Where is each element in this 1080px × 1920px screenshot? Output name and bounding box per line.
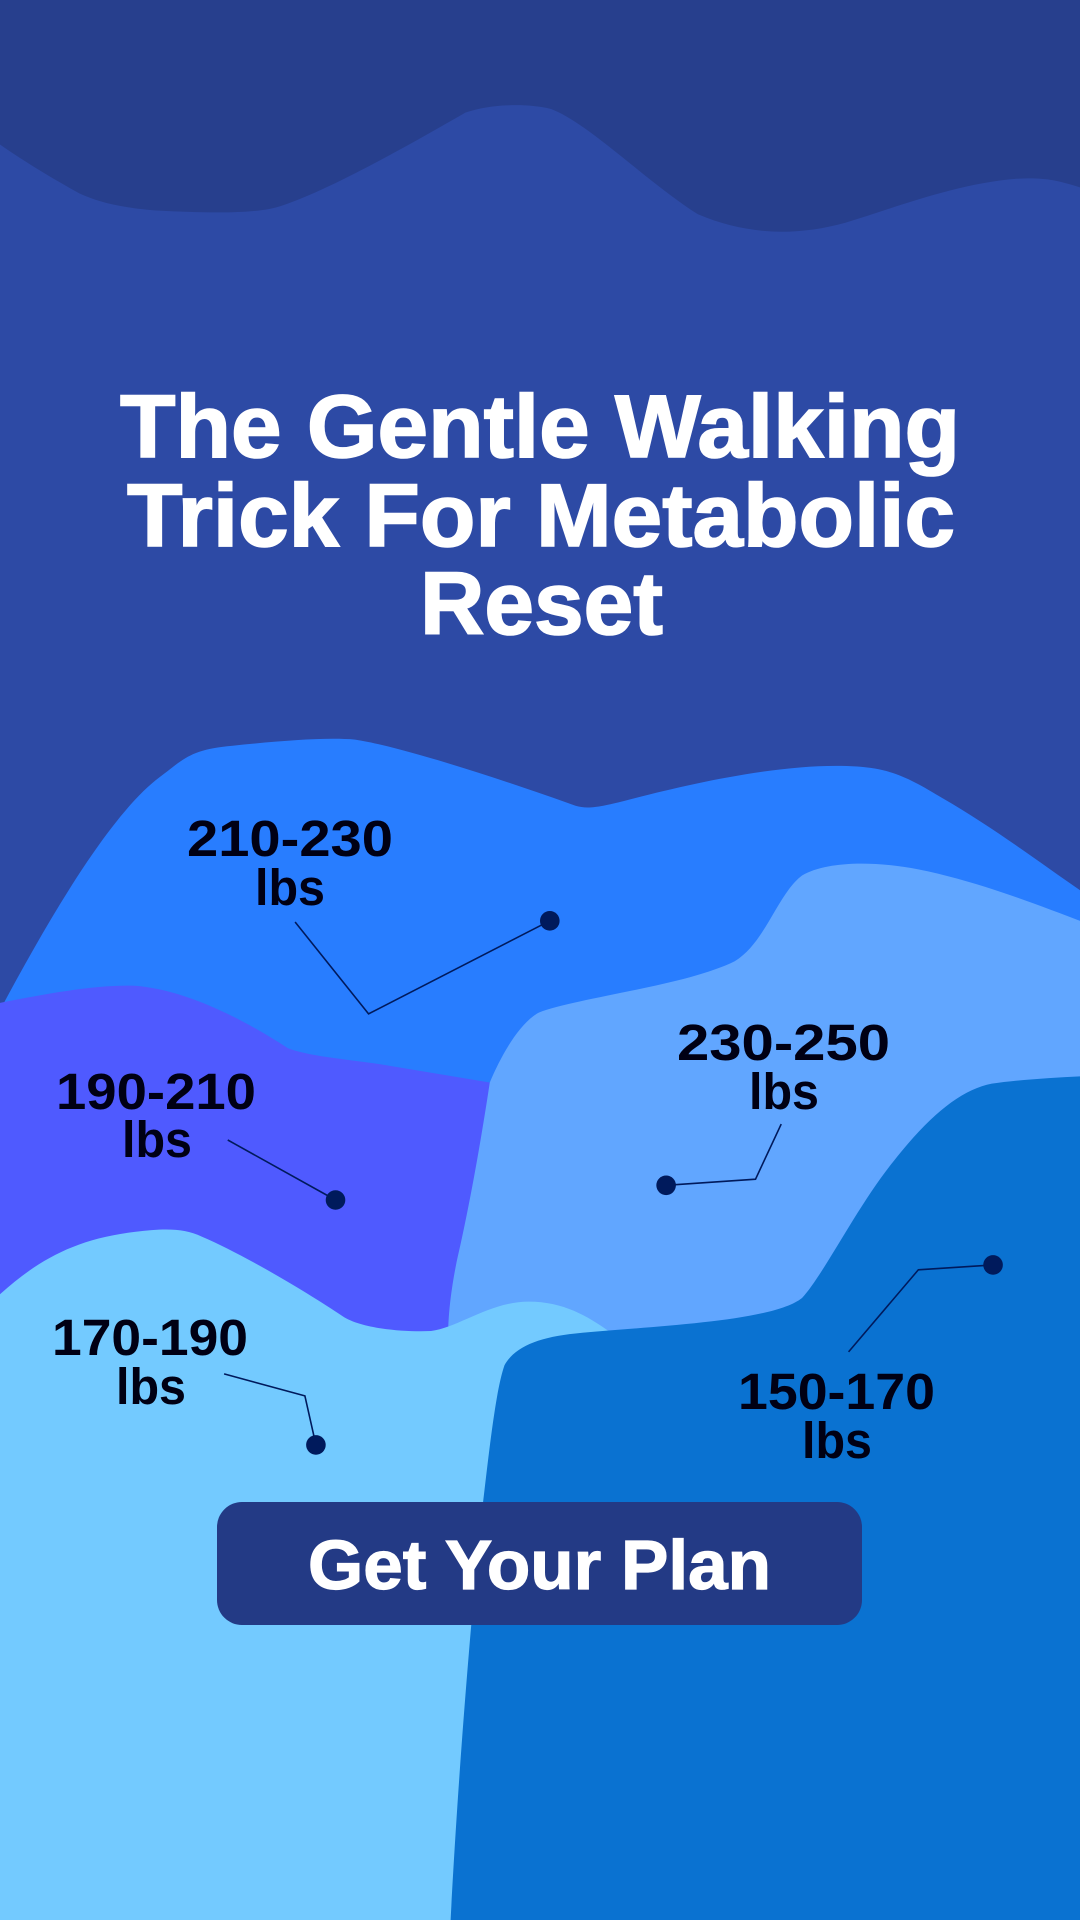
callout: 170-190 lbs [224,1374,326,1455]
label: 150-170 lbs: lbs [802,1412,872,1469]
label: 210-230 lbs: 210-230 [187,810,393,867]
label: 170-190 lbs: lbs [116,1358,186,1415]
callout: 210-230 lbs [295,911,560,1014]
label: 190-210 lbs [56,1063,256,1168]
callout: 190-210 lbs [228,1140,345,1210]
label: 210-230 lbs: lbs [255,859,325,916]
region: 230-250 lbs [448,864,1080,1469]
top dark wave [0,0,1080,232]
region: 170-190 lbs [0,1230,609,1920]
label: 150-170 lbs: 150-170 [738,1363,935,1420]
label: 230-250 lbs: lbs [749,1063,819,1120]
label: 210-230 lbs [187,810,393,916]
region: 150-170 lbs [451,1076,1080,1920]
label: 150-170 lbs [738,1363,935,1469]
region: 190-210 lbs [0,986,490,1347]
title: Trick For Metabolic [127,465,955,565]
label: 190-210 lbs: lbs [122,1111,192,1168]
callout: 230-250 lbs [656,1124,781,1195]
label: 230-250 lbs [677,1014,890,1120]
button: Get Your Plan: Get Your Plan [308,1526,771,1604]
title: Reset [420,553,663,653]
label: 190-210 lbs: 190-210 [56,1063,256,1120]
title: The Gentle Walking [120,376,960,476]
title [120,376,960,653]
label: 170-190 lbs [52,1309,248,1415]
label: 170-190 lbs: 170-190 [52,1309,248,1366]
region: 210-230 lbs [0,739,1080,1224]
callout: 150-170 lbs [849,1255,1003,1352]
label: 230-250 lbs: 230-250 [677,1014,890,1071]
button: Get Your Plan [217,1502,862,1625]
